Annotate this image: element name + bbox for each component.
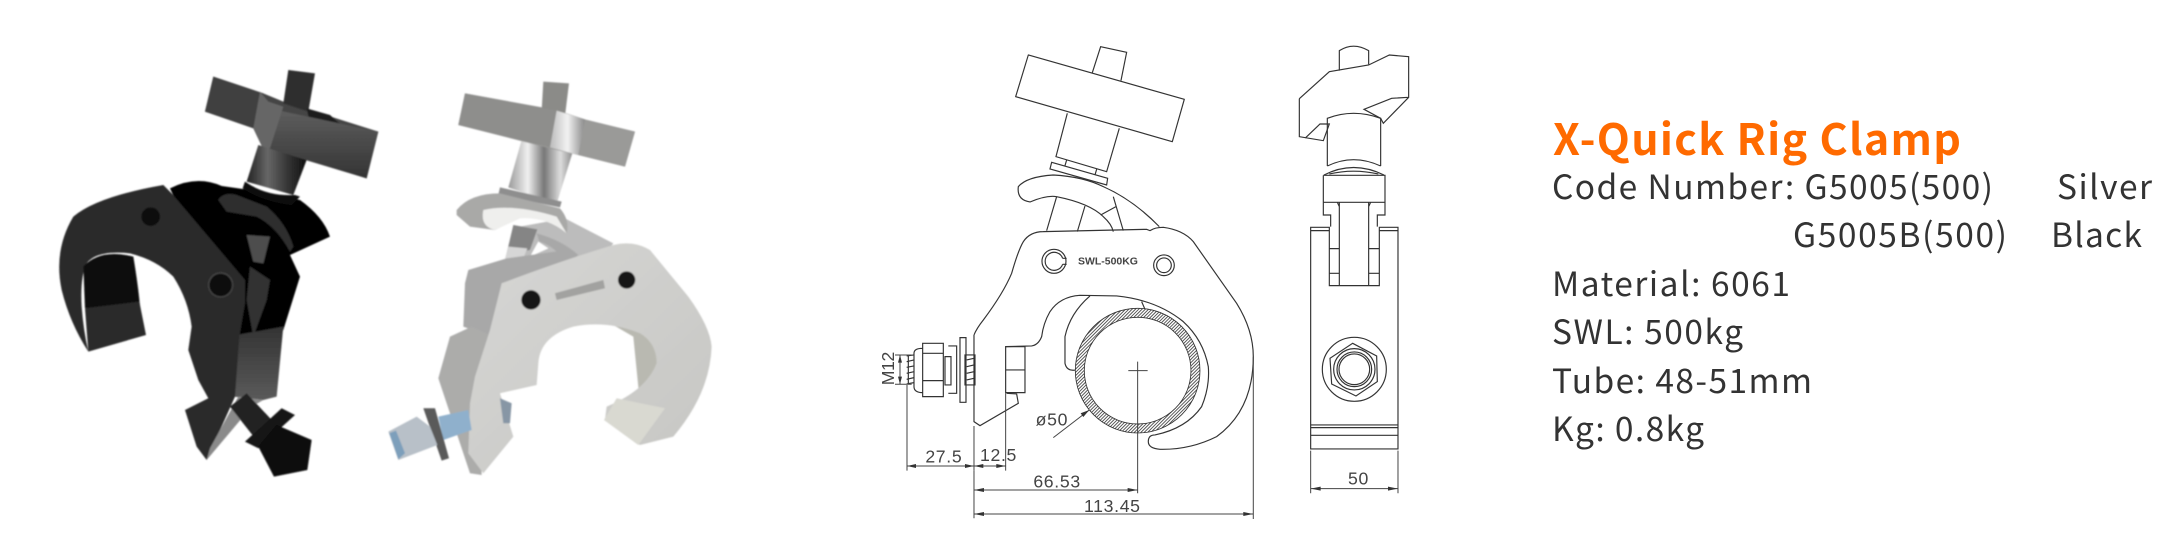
dimension: 66.53 — [974, 471, 1138, 518]
washer — [498, 187, 562, 207]
colour: silver: Silver — [2057, 160, 2153, 209]
wing knob: rear boss — [307, 108, 343, 127]
dimension: 27.5: 27.5 — [925, 447, 962, 467]
post — [508, 132, 573, 204]
stud — [1092, 47, 1127, 81]
material: Material: 6061 — [1552, 257, 1790, 306]
title: X-Quick Rig Clamp — [1553, 106, 1961, 168]
bolt threads — [907, 355, 975, 385]
hook back — [457, 193, 567, 233]
dimension: tube diameter: ø50 — [1036, 410, 1068, 430]
dimension: 113.45: 113.45 — [1084, 496, 1141, 516]
engraved mark — [555, 280, 605, 300]
clamp body outline — [974, 227, 1253, 449]
link pin — [247, 267, 270, 337]
hole: right — [618, 271, 635, 289]
back plate — [463, 250, 577, 337]
photo: silver clamp — [388, 82, 712, 475]
curved arm — [537, 233, 578, 263]
dimension: 27.5 — [907, 385, 974, 471]
thread ring — [1337, 352, 1372, 387]
outer washer — [1322, 337, 1386, 401]
lower gloss reflection — [207, 397, 263, 460]
dimension: 113.45 — [974, 357, 1253, 519]
dimension: M12 — [878, 351, 912, 385]
bolt washers — [245, 408, 295, 448]
left side surface — [438, 327, 493, 475]
bolt nut — [258, 425, 312, 477]
yoke — [1323, 175, 1385, 227]
centre bracket — [247, 235, 270, 263]
photo: black clamp — [59, 70, 378, 477]
lower thread — [507, 225, 537, 253]
jaw teeth — [85, 302, 146, 352]
jaw tip face — [604, 398, 665, 445]
main plate — [468, 243, 712, 473]
pin: right — [1154, 255, 1174, 276]
dimension: 66.53: 66.53 — [1033, 471, 1081, 491]
code number: silver: Code Number: G5005(500) — [1552, 160, 1993, 209]
rear link block — [513, 218, 613, 283]
post washer — [243, 182, 300, 205]
yoke inner plates — [1329, 202, 1379, 286]
lower right plate — [233, 327, 283, 400]
colour: black: Black — [2051, 208, 2142, 257]
safe working load: SWL: 500kg — [1552, 305, 1743, 354]
wing knob: centre hump — [253, 92, 283, 148]
tube centre cross — [1128, 362, 1148, 493]
knob post — [1056, 113, 1119, 175]
wing knob: left arm — [205, 77, 263, 128]
bolt thread — [438, 410, 472, 440]
bottom ribs — [1311, 425, 1398, 435]
wing knob: centre hump — [550, 111, 585, 155]
bolt nut — [914, 343, 943, 397]
wing knob silhouette — [205, 77, 378, 178]
side bolt — [907, 338, 975, 402]
tube size: Tube: 48-51mm — [1552, 354, 1812, 403]
dimension: 50 — [1311, 451, 1398, 493]
product specification text — [1552, 106, 2153, 451]
inner jaw depth — [613, 325, 679, 413]
hatched tube ring — [1075, 308, 1200, 433]
inner jaw — [1065, 296, 1145, 370]
main jaw plate — [59, 185, 245, 460]
post — [1327, 113, 1381, 166]
bolt nut — [388, 417, 437, 460]
tube section — [1075, 308, 1200, 493]
hole: lower — [209, 273, 233, 297]
bolt end — [1339, 354, 1370, 385]
rear body of black clamp — [170, 181, 330, 340]
wing knob: right arm — [270, 110, 378, 178]
wing knob silhouette — [458, 93, 635, 167]
post — [247, 145, 307, 195]
dimension: 50: 50 — [1348, 469, 1369, 489]
stud thread — [542, 82, 569, 116]
wing knob: right arm — [578, 119, 635, 167]
wing knob — [1299, 55, 1409, 141]
wing knob outline — [1016, 55, 1184, 142]
code number: black: G5005B(500) — [1793, 208, 2007, 257]
dimension: M12: M12 — [878, 351, 898, 385]
hole: upper — [141, 207, 160, 226]
engraved load label: SWL-500KG — [1078, 256, 1138, 267]
technical drawing: front view — [878, 47, 1253, 519]
dimension: 12.5 — [974, 393, 1017, 471]
hole: left — [521, 290, 541, 310]
wing knob: left arm — [458, 93, 557, 147]
dimension: 12.5: 12.5 — [980, 445, 1017, 465]
bolt washers — [423, 408, 449, 461]
stud — [1339, 46, 1369, 71]
bolt thread — [230, 393, 273, 438]
stud thread — [283, 70, 315, 112]
washer plate — [1050, 162, 1108, 185]
clamp face outline — [1311, 227, 1398, 449]
square nut — [1006, 347, 1025, 393]
collar — [1324, 167, 1384, 175]
dimension: tube diameter — [1036, 410, 1089, 438]
inner jaw gloss — [83, 254, 140, 308]
bolt washers — [948, 338, 966, 402]
triangular gap — [530, 242, 548, 257]
weight: Kg: 0.8kg — [1552, 402, 1704, 451]
bolt end view — [1322, 337, 1386, 401]
hook face — [483, 208, 567, 233]
technical drawing: side view — [1299, 46, 1409, 493]
hex nut — [1330, 343, 1377, 396]
hook lever — [1018, 175, 1159, 232]
hook lever — [218, 194, 293, 252]
pin: left — [1042, 249, 1067, 273]
nut blue end — [389, 431, 405, 459]
shiny link — [503, 247, 527, 273]
small rear nut — [500, 398, 512, 423]
nut rings — [1334, 349, 1375, 390]
